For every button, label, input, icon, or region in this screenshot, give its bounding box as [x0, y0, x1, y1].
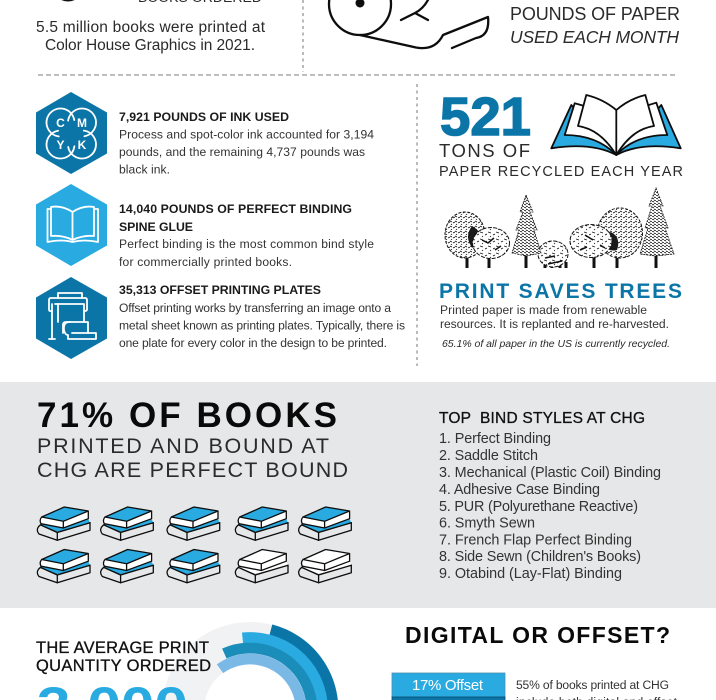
icon: books remnant: [59, 0, 77, 2]
heading: average print quantity: QUANTITY ORDERED: [36, 657, 211, 675]
text block: plates details: [119, 301, 405, 350]
heading: ink used: 7,921 POUNDS OF INK USED: [119, 110, 289, 124]
icon: CMYK hexagon: C: [56, 116, 65, 130]
chart: radial rings: [148, 608, 352, 700]
panel: books ordered: [36, 0, 266, 54]
icon: CMYK hexagon: [36, 92, 107, 174]
text block: renewable resources: resources. It is replanted and re-harvested.: [440, 317, 669, 331]
text block: ink details: black ink.: [119, 162, 170, 176]
icon: CMYK hexagon: M: [77, 116, 87, 130]
heading: top bind styles: TOP BIND STYLES AT CHG: [439, 410, 645, 427]
icon: printer hexagon: [36, 277, 107, 359]
number: 521: 521: [440, 87, 531, 147]
text block: glue details: [119, 237, 374, 269]
pictogram: book stacks: [37, 507, 351, 583]
heading: spine glue: 14,040 POUNDS OF PERFECT BINDING: [119, 202, 352, 216]
panel: average print quantity: [36, 608, 352, 700]
list: bind styles: 3. Mechanical (Plastic Coil) Binding: [439, 465, 661, 481]
list: bind styles: [439, 431, 661, 582]
chart: offset bar: [392, 673, 505, 700]
subheading: perfect bound: [37, 434, 348, 482]
text block: ink details: Process and spot-color ink accounted for 3,194: [119, 128, 374, 142]
heading: 71% of books: 71% OF BOOKS: [37, 396, 337, 435]
list: bind styles: 7. French Flap Perfect Binding: [439, 532, 632, 548]
list: bind styles: 9. Otabind (Lay-Flat) Binding: [439, 566, 622, 582]
panel: print saves trees: [439, 188, 682, 350]
text block: glue details: for commercially printed books.: [119, 255, 292, 269]
text block: recycled percentage: 65.1% of all paper in the US is currently recycled.: [442, 338, 670, 350]
text block: ink details: pounds, and the remaining 4,737 pounds was: [119, 145, 365, 159]
chart: offset bar: 17% Offset: [412, 677, 484, 694]
heading: spine glue: [119, 202, 352, 234]
panel: paper recycled: [439, 87, 683, 180]
heading: spine glue: SPINE GLUE: [119, 220, 193, 234]
text block: ink details: [119, 128, 374, 176]
icon: open book hexagon: [36, 184, 107, 266]
label: pounds of paper: POUNDS OF PAPER: [510, 4, 680, 24]
text block: glue details: Perfect binding is the most common bind style: [119, 237, 374, 251]
list: bind styles: 4. Adhesive Case Binding: [439, 482, 600, 498]
label: paper recycled each year: PAPER RECYCLED EACH YEAR: [439, 164, 683, 180]
list: bind styles: 5. PUR (Polyurethane Reactive): [439, 499, 638, 515]
text block: plates details: one plate for every color in the design to be printed.: [119, 336, 387, 350]
panel: perfect bound books: [0, 382, 716, 608]
text block: digital and offset: [516, 678, 678, 700]
subheading: perfect bound: CHG ARE PERFECT BOUND: [37, 458, 348, 482]
heading: print saves trees: PRINT SAVES TREES: [439, 280, 682, 303]
heading: average print quantity: THE AVERAGE PRINT: [36, 639, 209, 657]
icon: CMYK hexagon: K: [78, 138, 87, 152]
panel: digital or offset: [392, 622, 678, 700]
label: used each month: USED EACH MONTH: [510, 27, 679, 47]
text block: books printed: 5.5 million books were printed at: [36, 19, 266, 36]
text block: renewable resources: Printed paper is made from renewable: [440, 303, 647, 317]
panel: printing plates: [36, 277, 405, 359]
icon: open book: [551, 95, 681, 155]
text block: digital and offset: 55% of books printed at CHG: [516, 678, 669, 692]
text block: plates details: Offset printing works by transferring an image onto a: [119, 301, 391, 315]
illustration: trees: [445, 188, 674, 268]
icon: paper roll: [329, 0, 488, 48]
list: bind styles: 6. Smyth Sewn: [439, 516, 535, 532]
heading: digital or offset: DIGITAL OR OFFSET?: [405, 622, 670, 648]
list: bind styles: 2. Saddle Stitch: [439, 448, 538, 464]
icon: CMYK hexagon: Y: [56, 138, 65, 152]
panel: pounds of paper: [329, 0, 680, 48]
list: bind styles: 1. Perfect Binding: [439, 431, 551, 447]
subheading: perfect bound: PRINTED AND BOUND AT: [37, 434, 329, 458]
text block: books printed: [36, 19, 266, 54]
text block: books printed: Color House Graphics in 2021.: [45, 37, 255, 54]
text block: renewable resources: [440, 303, 669, 331]
panel: ink used: [36, 92, 374, 176]
text block: plates details: metal sheet known as printing plates. Typically, there is: [119, 318, 405, 332]
heading: average print quantity: [36, 639, 211, 675]
heading: printing plates: 35,313 OFFSET PRINTING PLATES: [119, 283, 321, 297]
list: bind styles: 8. Side Sewn (Children's Books): [439, 549, 641, 565]
panel: spine glue: [36, 184, 374, 269]
label: tons of: TONS OF: [439, 140, 530, 161]
